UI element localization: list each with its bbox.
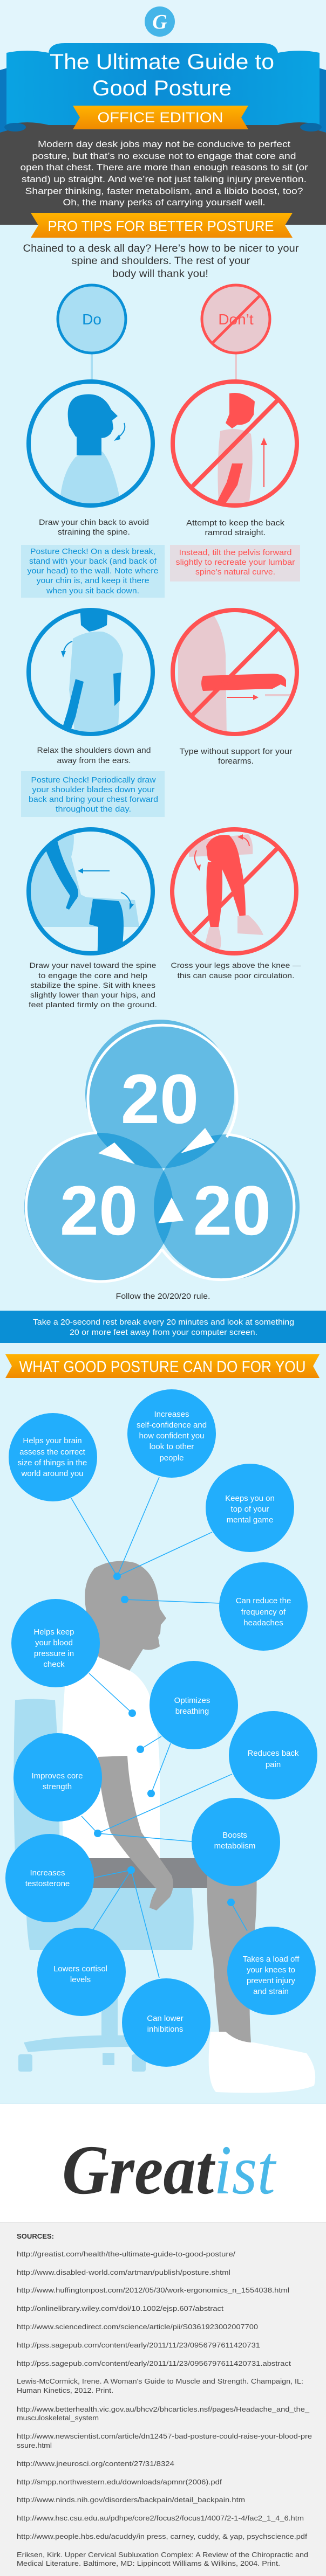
caption tip 1 dont xyxy=(186,518,285,537)
caption tip 3 dont xyxy=(171,961,301,980)
benefit: self-confidence: how confident you xyxy=(139,1431,204,1441)
benefit: self-confidence: Increases xyxy=(154,1410,189,1419)
benefit: headaches: Can reduce the xyxy=(236,1596,291,1605)
person silhouette xyxy=(62,1561,315,2093)
logo: G badge: G xyxy=(152,11,167,33)
icon: Do xyxy=(58,285,126,353)
rule caption: Follow the 20/20/20 rule. xyxy=(116,1292,210,1301)
benefit: mental game xyxy=(206,1464,294,1552)
intro paragraph: stand) up straight. And we’re not just talking injury prevention. xyxy=(22,174,307,184)
20/20/20 venn diagram: 20 xyxy=(193,1171,271,1250)
posture check box 2: throughout the day. xyxy=(56,805,131,814)
benefit: blood pressure: check xyxy=(43,1660,65,1669)
benefit: brain: Helps your brain xyxy=(23,1436,82,1445)
benefit: self-confidence: look to other xyxy=(150,1442,194,1451)
benefit: testosterone: Increases xyxy=(30,1868,65,1878)
tip 1 dont: ramrod xyxy=(173,382,297,512)
sources list: http://www.newscientist.com/article/dn12457-bad-posture-could-raise-your-blood-pre xyxy=(17,2433,312,2440)
sources list: Medical Literature. Baltimore, MD: Lippincott Williams & Wilkins, 2004. Print. xyxy=(17,2560,280,2567)
pelvis tip box xyxy=(170,545,300,581)
benefit: inhibitions xyxy=(122,1978,210,2067)
20/20/20 venn diagram: 20 xyxy=(60,1171,138,1250)
title xyxy=(50,50,274,100)
white logo panel xyxy=(0,2103,326,2222)
posture check box 1: stand with your back (and back of xyxy=(29,557,157,566)
sources list xyxy=(17,2233,312,2567)
benefit: mental game: Keeps you on xyxy=(225,1494,275,1503)
sources list: http://www.jneurosci.org/content/27/31/8324 xyxy=(17,2460,174,2468)
benefit: brain xyxy=(9,1413,97,1501)
pro tips intro text: body will thank you! xyxy=(112,268,208,280)
caption tip 3 dont: Cross your legs above the knee — xyxy=(171,961,301,970)
benefit: blood pressure: Helps keep xyxy=(33,1628,74,1637)
benefit: cortisol: Lowers cortisol xyxy=(53,1964,107,1973)
sources list: http://www.huffingtonpost.com/2012/05/30/work-ergonomics_n_1554038.html xyxy=(17,2287,289,2294)
benefit: headaches: headaches xyxy=(243,1618,283,1628)
sources list: http://www.people.hbs.edu/acuddy/in press, carney, cuddy, & yap, psychscience.pdf xyxy=(17,2533,308,2540)
connector lines xyxy=(71,1477,247,1978)
logo: G badge xyxy=(145,6,175,37)
pelvis tip box: Instead, tilt the pelvis forward xyxy=(179,548,291,557)
benefit: self-confidence xyxy=(127,1389,216,1478)
intro paragraph: Modern day desk jobs may not be conducive to perfect xyxy=(38,139,290,149)
banner: office edition xyxy=(73,106,248,129)
benefit: blood pressure: your blood xyxy=(35,1638,73,1647)
sources list: http://www.hsc.csu.edu.au/pdhpe/core2/focus2/focus1/4007/2-1-4/fac2_1_4_6.htm xyxy=(17,2515,304,2522)
icon: Don't xyxy=(202,285,270,353)
benefit: brain: assess the correct xyxy=(19,1448,86,1457)
sources list: ssure.html xyxy=(17,2442,52,2449)
posture check box 2: your shoulder blades down your xyxy=(32,785,154,794)
sources list: SOURCES: xyxy=(17,2233,54,2240)
benefit: testosterone: testosterone xyxy=(25,1879,70,1888)
caption tip 1 do: Draw your chin back to avoid xyxy=(39,518,149,527)
20/20/20 explanation band xyxy=(0,1311,326,1343)
pro tips intro text: Chained to a desk all day? Here’s how to be nicer to your xyxy=(23,243,299,254)
posture check box 1: when you sit back down. xyxy=(46,586,139,595)
sources list: http://www.ninds.nih.gov/disorders/backpain/detail_backpain.htm xyxy=(17,2496,245,2504)
caption tip 3 do: Draw your navel toward the spine xyxy=(29,961,157,970)
benefit: brain: size of things in the xyxy=(18,1458,87,1467)
sources list: http://www.disabled-world.com/artman/publish/posture.shtml xyxy=(17,2269,230,2276)
banner: pro tips: PRO TIPS FOR BETTER POSTURE xyxy=(47,218,274,234)
benefit: self-confidence: self-confidence and xyxy=(137,1421,207,1430)
benefit: metabolism: metabolism xyxy=(214,1841,255,1851)
posture check box 1: Posture Check! On a desk break, xyxy=(30,547,155,556)
posture check box 2: back and bring your chest forward xyxy=(29,795,158,804)
caption tip 1 do xyxy=(39,518,149,537)
benefit: headaches: frequency of xyxy=(241,1608,286,1617)
benefit: knees: your knees to xyxy=(247,1965,295,1975)
icon: Do: Do xyxy=(82,311,101,328)
posture check box 1: your chin is, and keep it there xyxy=(37,576,149,585)
intro paragraph: open that chest. There are more than enough reasons to sit (or xyxy=(21,162,308,172)
benefit: back pain: Reduces back xyxy=(247,1749,299,1758)
benefit: metabolism xyxy=(192,1798,280,1886)
benefit: blood pressure xyxy=(11,1599,100,1687)
benefit: cortisol: levels xyxy=(70,1975,91,1984)
caption tip 2 dont: forearms. xyxy=(218,757,254,766)
benefit: knees: Takes a load off xyxy=(243,1955,300,1964)
connector dots xyxy=(94,1573,235,1906)
sources list: Eriksen, Kirk. Upper Cervical Subluxation Complex: A Review of the Chiropractic and xyxy=(17,2551,308,2559)
caption tip 1 dont: Attempt to keep the back xyxy=(186,518,285,528)
intro paragraph xyxy=(21,139,308,207)
pelvis tip box: slightly to recreate your lumbar xyxy=(176,558,295,567)
benefit: core strength xyxy=(13,1733,102,1822)
benefit: mental game: top of your xyxy=(231,1505,269,1514)
title: The Ultimate Guide to xyxy=(50,50,274,74)
benefit: inhibitions: inhibitions xyxy=(147,2025,183,2034)
benefit: self-confidence: people xyxy=(159,1453,184,1463)
benefit: breathing: Optimizes xyxy=(174,1696,210,1705)
tip 3 dont: crossed legs xyxy=(172,829,296,954)
benefit: knees: prevent injury xyxy=(247,1976,296,1985)
benefit: brain: world around you xyxy=(21,1469,84,1478)
benefit: cortisol xyxy=(37,1928,126,2016)
sources list: http://pss.sagepub.com/content/early/2011/11/23/0956797611420731.abstract xyxy=(17,2360,291,2367)
tip 2 do: shoulders xyxy=(29,604,153,744)
posture check box 2: Posture Check! Periodically draw xyxy=(31,775,156,785)
caption tip 2 do xyxy=(37,746,151,765)
20/20/20 explanation band: Take a 20-second rest break every 20 minutes and look at something xyxy=(33,1318,294,1327)
pro tips intro text xyxy=(23,243,299,280)
caption tip 1 dont: ramrod straight. xyxy=(205,528,266,537)
posture check box 1 xyxy=(21,545,165,598)
benefit: back pain xyxy=(229,1711,317,1799)
benefit: blood pressure: pressure in xyxy=(34,1649,74,1658)
caption tip 2 dont xyxy=(179,747,293,766)
benefit: breathing: breathing xyxy=(175,1707,209,1716)
title ribbon xyxy=(0,43,326,133)
tip 1 do: chin xyxy=(29,382,153,509)
sources list: http://www.betterhealth.vic.gov.au/bhcv2/bhcarticles.nsf/pages/Headache_and_the_ xyxy=(17,2406,310,2413)
logo: Greatist: Greatist xyxy=(62,2131,277,2209)
caption tip 2 dont: Type without support for your xyxy=(179,747,293,756)
intro paragraph: Sharper thinking, faster metabolism, and a libido boost, too? xyxy=(25,186,303,196)
caption tip 3 do: to engage the core and help xyxy=(38,971,147,980)
benefit: headaches xyxy=(219,1562,308,1651)
banner: pro tips xyxy=(31,213,293,238)
sources panel xyxy=(0,2222,326,2576)
caption tip 2 do: Relax the shoulders down and xyxy=(37,746,151,755)
pro tips intro text: spine and shoulders. The rest of your xyxy=(71,255,250,267)
caption tip 2 do: away from the ears. xyxy=(57,756,131,765)
caption tip 3 do: stabilize the spine. Sit with knees xyxy=(30,981,155,989)
benefit: knees xyxy=(227,1927,316,2015)
posture check box 1: your head) to the wall. Note where xyxy=(27,566,159,576)
benefit: core strength: strength xyxy=(43,1782,72,1791)
benefit: metabolism: Boosts xyxy=(222,1831,247,1840)
sources list: Lewis-McCormick, Irene. A Woman's Guide to Muscle and Strength. Champaign, IL: xyxy=(17,2378,303,2385)
caption tip 1 do: straining the spine. xyxy=(58,528,130,537)
benefit: breathing xyxy=(150,1661,238,1749)
posture check box 2 xyxy=(21,771,165,817)
20/20/20 explanation band: 20 or more feet away from your computer screen. xyxy=(70,1328,257,1337)
sources list: musculoskeletal_system xyxy=(17,2414,99,2422)
caption tip 3 do: feet planted firmly on the ground. xyxy=(29,1000,157,1009)
icon: Don't: Don’t xyxy=(218,311,254,328)
sources list: http://greatist.com/health/the-ultimate-guide-to-good-posture/ xyxy=(17,2250,236,2258)
sources list: http://onlinelibrary.wiley.com/doi/10.1002/ejsp.607/abstract xyxy=(17,2305,224,2312)
caption tip 3 do: slightly lower than your hips, and xyxy=(30,991,155,999)
20/20/20 venn diagram: 20 xyxy=(121,1060,199,1138)
caption tip 3 do xyxy=(29,961,157,1009)
banner: office edition: OFFICE EDITION xyxy=(97,109,223,126)
benefit: back pain: pain xyxy=(266,1760,281,1769)
connector lines xyxy=(91,354,93,380)
intro paragraph: Oh, the many perks of carrying yourself well. xyxy=(63,197,266,207)
benefit: knees: and strain xyxy=(253,1987,289,1996)
chair xyxy=(13,1699,194,2072)
benefit: testosterone xyxy=(5,1834,94,1922)
benefit: mental game: mental game xyxy=(227,1515,273,1525)
sources list: http://smpp.northwestern.edu/downloads/apmnr(2006).pdf xyxy=(17,2478,222,2486)
tip 2 dont: forearms xyxy=(173,608,297,738)
benefit: inhibitions: Can lower xyxy=(147,2014,184,2023)
sources list: http://pss.sagepub.com/content/early/2011/11/23/0956797611420731 xyxy=(17,2342,260,2349)
caption tip 3 dont: this can cause poor circulation. xyxy=(177,971,295,980)
20/20/20 venn diagram xyxy=(24,1020,300,1282)
intro paragraph: posture, but that’s no excuse not to engage that core and xyxy=(32,151,296,161)
sources list: Human Kinetics, 2012. Print. xyxy=(17,2387,113,2394)
sources list: http://www.sciencedirect.com/science/article/pii/S0361923002007700 xyxy=(17,2323,258,2331)
pelvis tip box: spine’s natural curve. xyxy=(195,567,275,577)
title: Good Posture xyxy=(92,77,232,100)
tip 3 do: core xyxy=(27,829,153,965)
dark intro panel xyxy=(0,115,326,225)
benefit: core strength: Improves core xyxy=(31,1771,83,1781)
